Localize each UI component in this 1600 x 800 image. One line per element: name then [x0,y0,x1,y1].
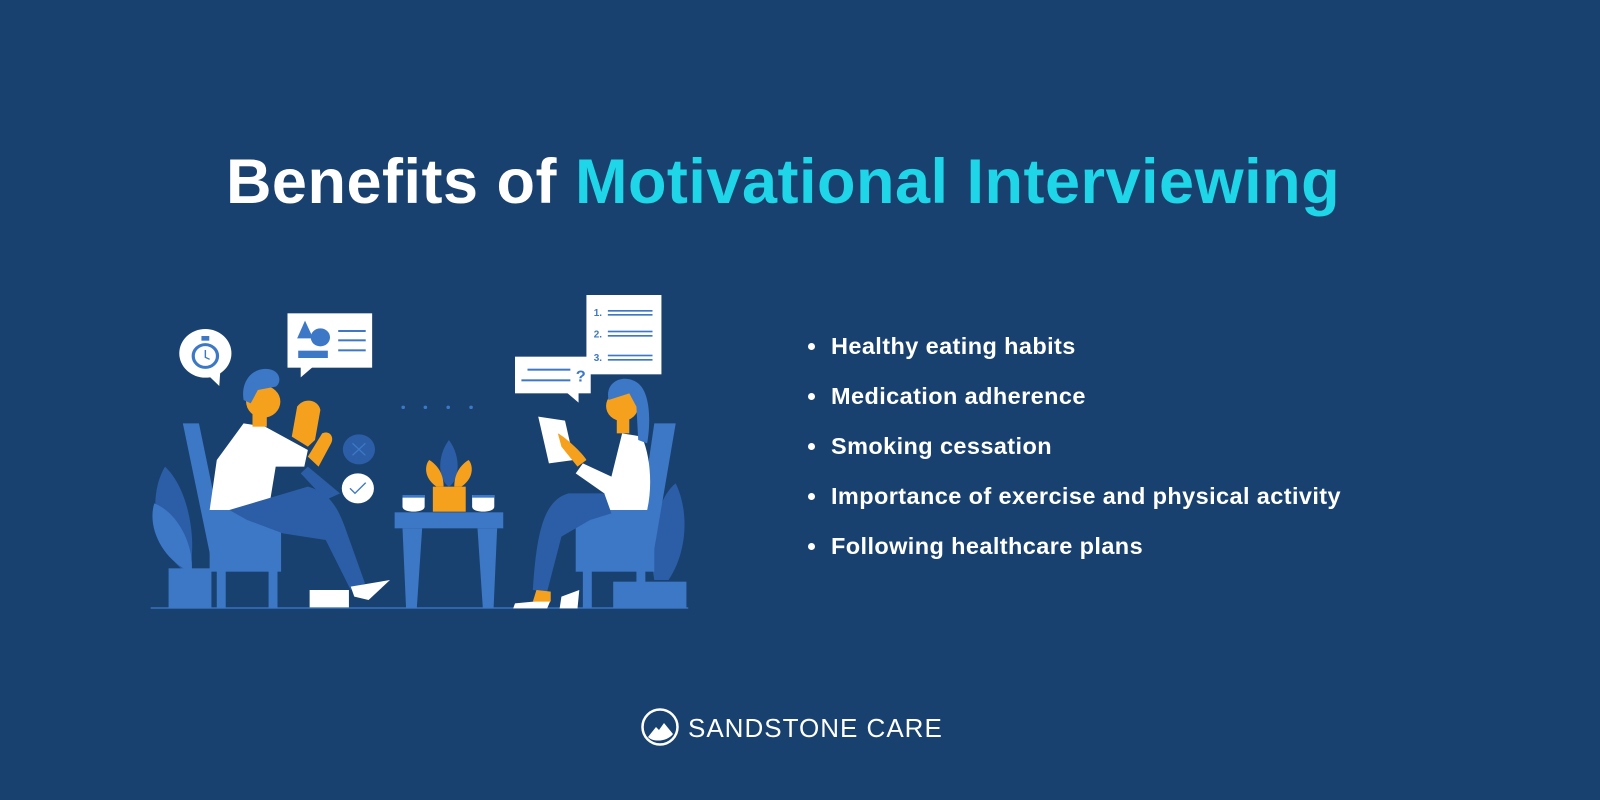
illustration: counseling session [150,295,688,609]
speech bubble: numbered list [586,295,661,374]
table with plant and cups [395,440,503,608]
speech bubble: numbered list: 3. [594,353,602,364]
bullet list: benefits: Medication adherence [831,383,1086,409]
logo: Sandstone Care [641,708,943,746]
right chair [576,423,676,608]
speech bubble: question [515,357,591,403]
ground line [151,607,688,609]
woman figure [513,379,650,608]
man figure [210,369,390,607]
bullet list: benefits: Healthy eating habits [831,333,1076,359]
bullet list: benefits: Importance of exercise and physical activity [831,483,1341,509]
bullet list: benefits: Smoking cessation [831,433,1052,459]
icon: mountain circle [641,708,679,746]
bullet list: benefits: Following healthcare plans [831,533,1143,559]
dots [401,406,473,409]
icon: left chair [183,423,281,608]
speech bubble: question: ? [576,369,586,386]
speech bubble: shapes [288,313,372,377]
speech bubble: numbered list: 2. [594,329,602,340]
bullet list: benefits [808,333,1341,559]
title: Benefits of Motivational Interviewing [226,147,1340,217]
icons: cross and check bubbles [342,434,375,503]
speech bubble: stopwatch [179,329,231,386]
speech bubble: numbered list: 1. [594,308,602,319]
right plant [613,483,686,608]
logo: Sandstone Care: SANDSTONE CARE [688,713,943,743]
icon: left plant [152,467,211,608]
